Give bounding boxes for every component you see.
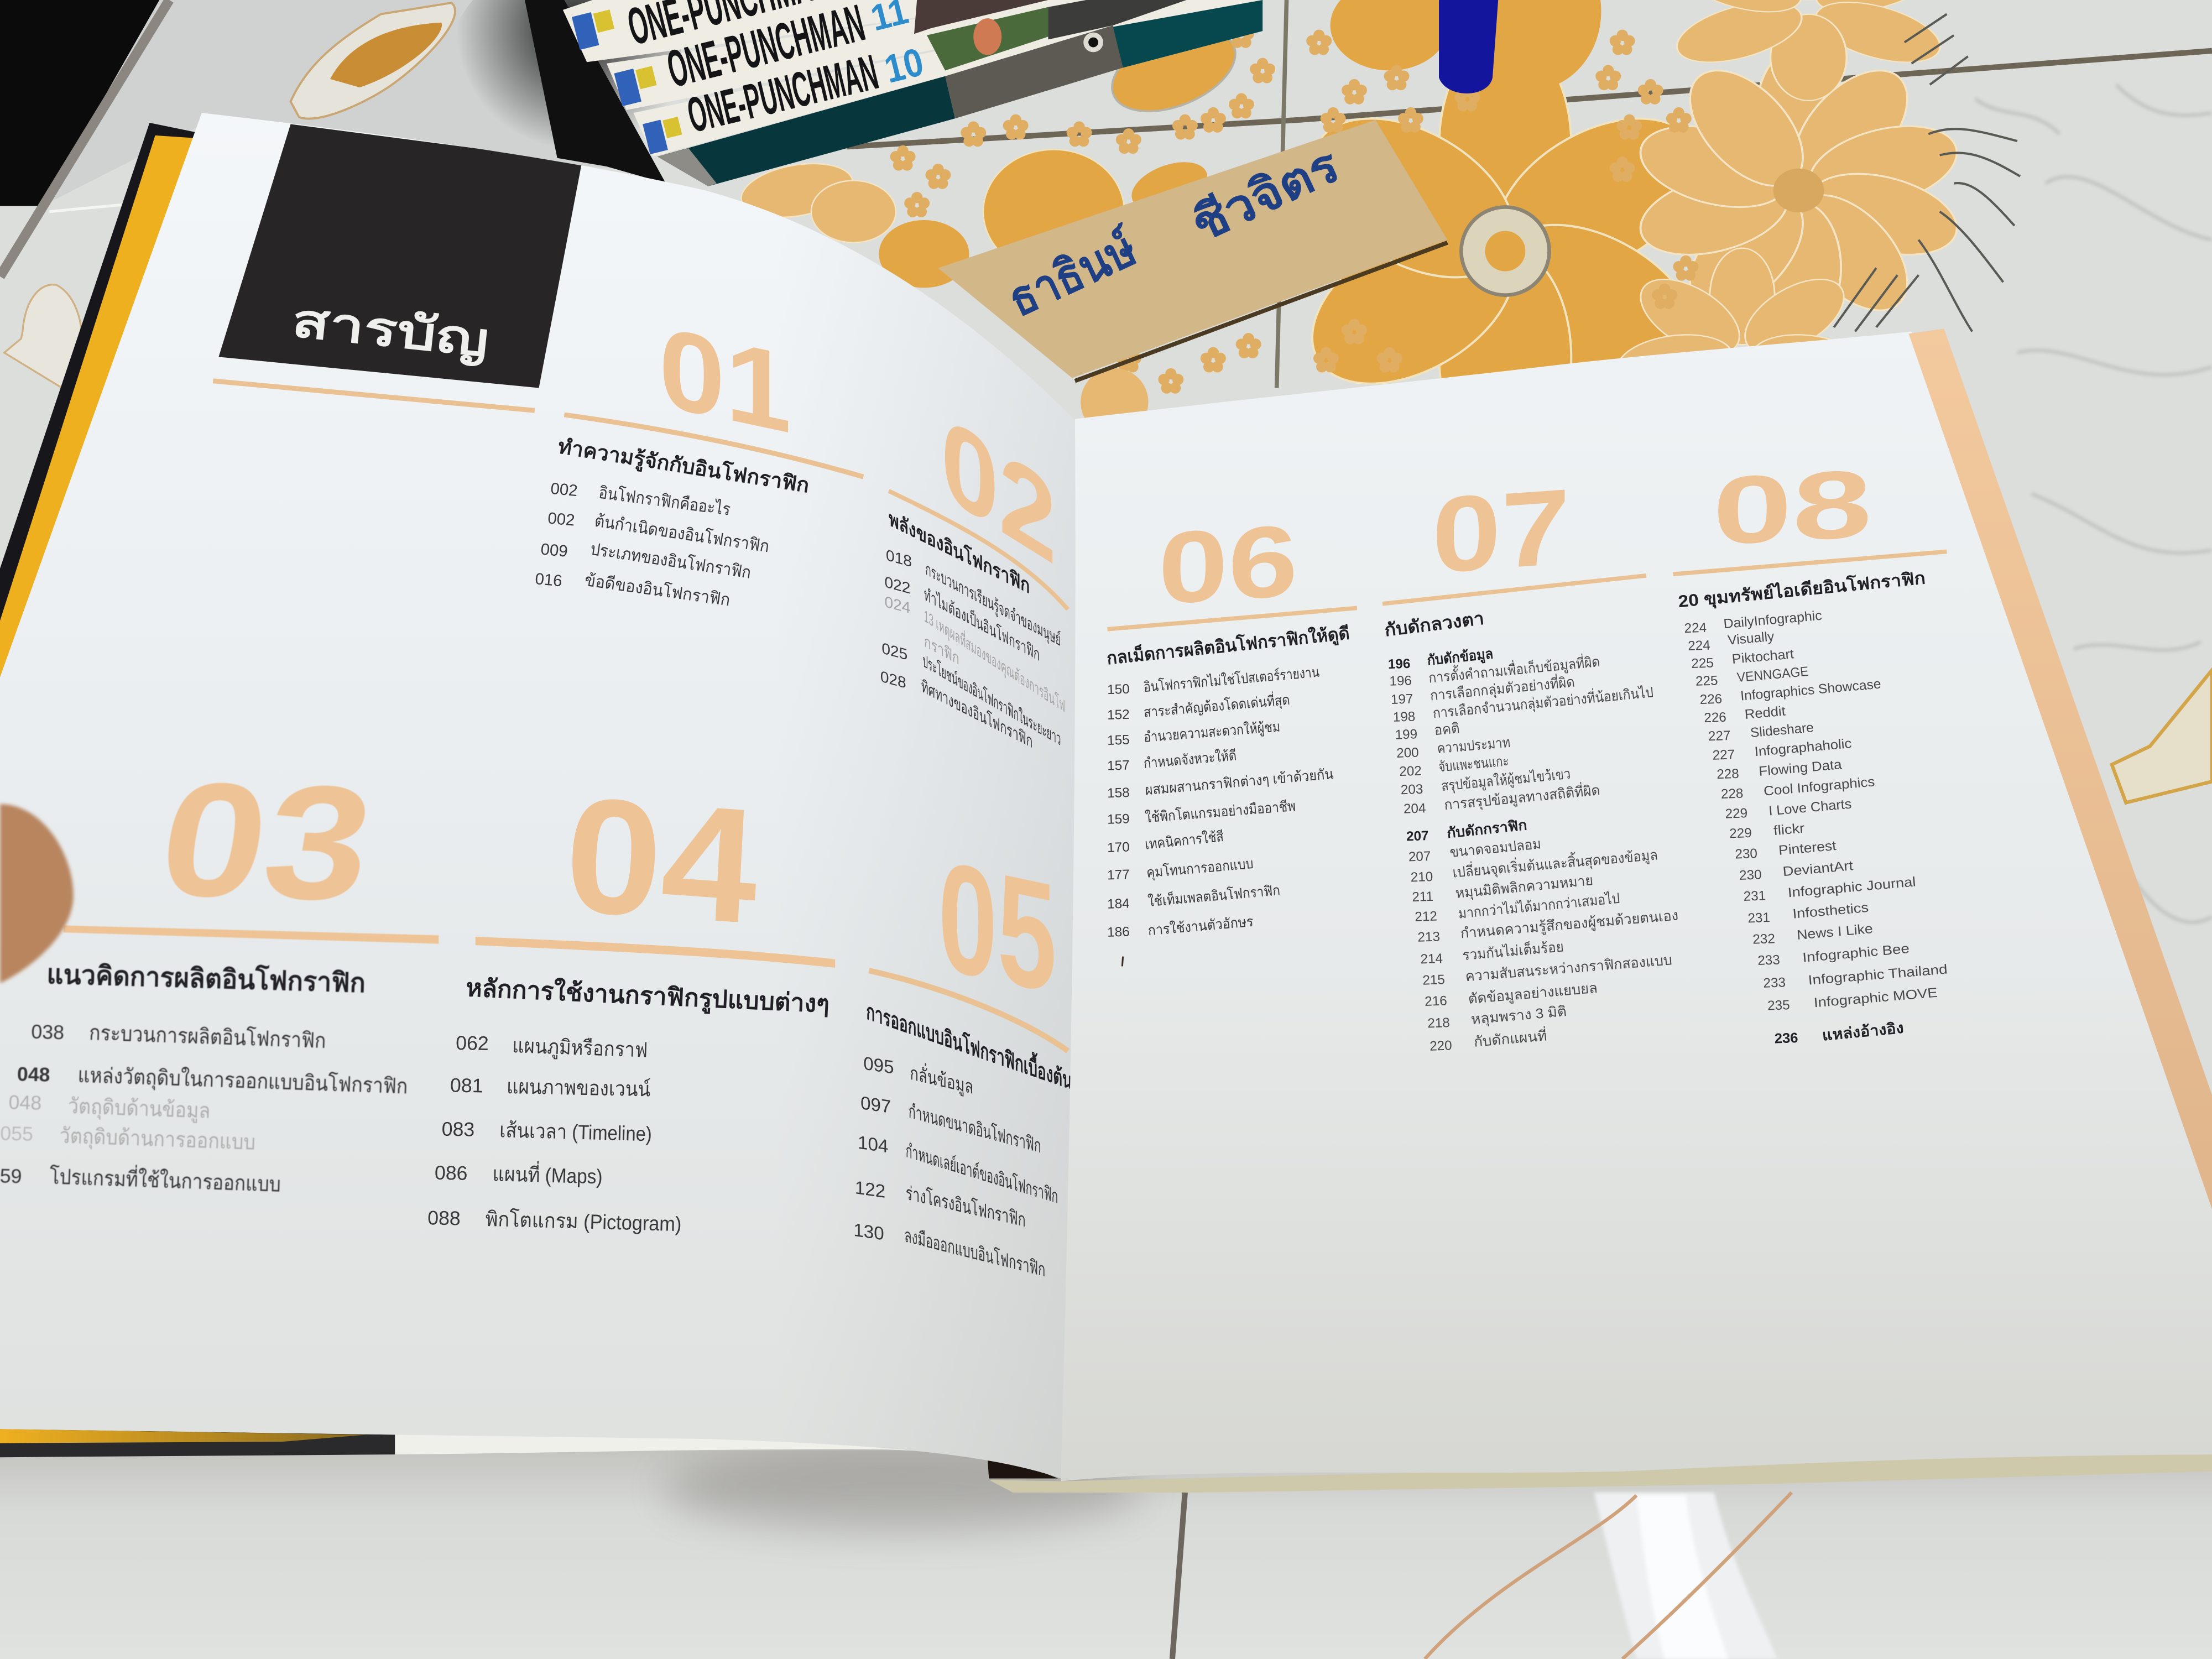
section 07: การเลือกกลุ่มตัวอย่างที่ผิด xyxy=(1429,672,1575,705)
section 08: 20 ขุมทรัพย์ไอเดียอินโฟกราฟิก xyxy=(1677,567,1926,612)
section 06: สาระสำคัญต้องโดดเด่นที่สุด xyxy=(1143,690,1291,721)
section 08: 226 xyxy=(1699,692,1723,707)
section 06: 186 xyxy=(1107,924,1130,940)
section 07: เปลี่ยนจุดเริ่มต้นและสิ้นสุดของข้อมูล xyxy=(1452,844,1658,881)
section 02: กระบวนการเรียนรู้จดจำของมนุษย์ xyxy=(925,559,1061,651)
section 04 xyxy=(427,762,835,1235)
section 08: 230 xyxy=(1735,846,1757,862)
section 07: 212 xyxy=(1415,909,1437,925)
section 08: 228 xyxy=(1721,786,1744,802)
section 08: 225 xyxy=(1691,656,1714,671)
section 07: 213 xyxy=(1417,929,1440,945)
section 07: การสรุปข้อมูลทางสถิติที่ผิด xyxy=(1443,780,1601,813)
section 05: 104 xyxy=(858,1133,888,1157)
section 05: 130 xyxy=(853,1220,884,1244)
section 08: flickr xyxy=(1773,821,1805,838)
marble veins on the right tile xyxy=(1975,85,2212,922)
section 06: อินโฟกราฟิกไม่ใช่โปสเตอร์รายงาน xyxy=(1143,664,1320,695)
section 07: 207 xyxy=(1408,849,1431,864)
section 03: 038 xyxy=(31,1021,65,1044)
section 08: 233 xyxy=(1757,953,1780,968)
section 08: Infographic Journal xyxy=(1787,874,1916,900)
section 07: 197 xyxy=(1391,692,1413,707)
section 07: กำหนดความรู้สึกของผู้ชมด้วยตนเอง xyxy=(1460,907,1679,942)
section 08: 227 xyxy=(1708,728,1731,744)
section 08 xyxy=(1673,450,1948,1046)
section 06: เทคนิคการใช้สี xyxy=(1144,828,1224,853)
section 08: แหล่งอ้างอิง xyxy=(1822,1020,1905,1044)
section 07: มากกว่าไม่ได้มากกว่าเสมอไป xyxy=(1458,890,1620,922)
section 07: 215 xyxy=(1422,972,1445,988)
section 06: 184 xyxy=(1107,896,1130,912)
small tick mark xyxy=(1122,957,1123,966)
section 03: วัตถุดิบด้านข้อมูล xyxy=(67,1094,211,1124)
section 06: 177 xyxy=(1107,867,1130,883)
section 05: 097 xyxy=(860,1093,891,1118)
section 04: แผนภาพของเวนน์ xyxy=(507,1075,651,1100)
section 04: 04 xyxy=(561,762,764,958)
section 07 xyxy=(1383,466,1679,1054)
section 08: 230 xyxy=(1739,867,1762,883)
section 07: หมุนมิติพลิกความหมาย xyxy=(1455,873,1594,902)
section 08: News I Like xyxy=(1796,921,1874,943)
leaf on right tile xyxy=(2112,670,2212,803)
section 07: รวมกันไม่เต็มร้อย xyxy=(1462,938,1564,963)
section 06: 150 xyxy=(1107,682,1130,697)
section 06: 152 xyxy=(1107,707,1130,723)
section 05: การออกแบบอินโฟกราฟิกเบื้องต้น xyxy=(866,994,1072,1094)
section 07: ขนาดจอมปลอม xyxy=(1449,836,1542,860)
section 06: คุมโทนการออกแบบ xyxy=(1146,855,1254,881)
section 08: 228 xyxy=(1717,766,1739,782)
section 01: 01 xyxy=(659,302,791,457)
section 07: สรุปข้อมูลให้ผู้ชมไขว้เขว xyxy=(1441,766,1571,795)
section 05: 095 xyxy=(863,1053,894,1078)
right page peach strip xyxy=(1909,328,2212,1209)
book: volume 11 spine xyxy=(607,0,1186,110)
section 06: 170 xyxy=(1107,839,1130,855)
section 07: 210 xyxy=(1410,869,1433,885)
section 01 xyxy=(535,332,864,606)
section 06: 159 xyxy=(1107,811,1130,827)
section 08: 229 xyxy=(1729,826,1752,841)
title block: สารบัญ xyxy=(218,124,582,388)
section 03: วัตถุดิบด้านการออกแบบ xyxy=(59,1124,256,1155)
section 08: 224 xyxy=(1688,638,1710,654)
section 08: Pinterest xyxy=(1778,838,1837,858)
section 01: ประเภทของอินโฟกราฟิก xyxy=(589,539,753,582)
section 07: 196 xyxy=(1387,656,1411,672)
section 04: หลักการใช้งานกราฟิกรูปแบบต่างๆ xyxy=(465,973,830,1020)
section 05: 05 xyxy=(938,828,1057,1026)
section 01: อินโฟกราฟิกคืออะไร xyxy=(598,483,732,519)
section 07: 207 xyxy=(1406,828,1429,844)
section 07: 218 xyxy=(1427,1015,1450,1031)
section 06: กลเม็ดการผลิตอินโฟกราฟิกให้ดูดี xyxy=(1105,622,1351,670)
section 08: Infographic Thailand xyxy=(1808,962,1948,988)
section 07: 220 xyxy=(1430,1038,1452,1054)
section 07: ตัดข้อมูลอย่างแยบยล xyxy=(1468,980,1598,1008)
title block: สารบัญ: สารบัญ xyxy=(289,294,492,368)
section 07: กับดักแผนที่ xyxy=(1473,1026,1547,1050)
rule under title xyxy=(213,381,535,410)
section 05: กำหนดขนาดอินโฟกราฟิก xyxy=(909,1100,1041,1157)
section 01: 002 xyxy=(550,479,578,500)
section 02: 13 เหตุผลที่สมองของคุณต้องการอินโฟ xyxy=(924,604,1065,717)
section 06: 155 xyxy=(1107,733,1130,748)
section 06: 158 xyxy=(1107,785,1130,801)
section 03: แนวคิดการผลิตอินโฟกราฟิก xyxy=(46,958,366,998)
section 08: Flowing Data xyxy=(1758,757,1843,779)
section 07: กับดักลวงตา xyxy=(1384,608,1485,640)
section 08: 224 xyxy=(1684,620,1707,636)
section 04: 083 xyxy=(441,1118,475,1141)
section 02: 022 xyxy=(884,573,910,598)
section 07: การเลือกจำนวนกลุ่มตัวอย่างที่น้อยเกินไป xyxy=(1432,682,1654,722)
section 07: 07 xyxy=(1432,466,1570,596)
section 08: 227 xyxy=(1712,747,1735,763)
section 03: 055 xyxy=(0,1122,33,1145)
section 08: 232 xyxy=(1752,931,1775,947)
section 07: 198 xyxy=(1392,709,1416,725)
section 06: กำหนดจังหวะให้ดี xyxy=(1143,747,1237,771)
section 07: การตั้งคำถามเพื่อเก็บข้อมูลที่ผิด xyxy=(1428,651,1601,687)
book: volume 10 spine: 10 xyxy=(880,40,928,92)
section 07: 202 xyxy=(1399,764,1422,779)
section 06 xyxy=(1105,504,1357,940)
section 05: 122 xyxy=(855,1177,885,1202)
section 07: 211 xyxy=(1412,889,1433,905)
section 01: ต้นกำเนิดของอินโฟกราฟิก xyxy=(593,511,770,556)
section 07: จับแพะชนแกะ xyxy=(1438,753,1510,775)
section 05: กลั่นข้อมูล xyxy=(910,1060,973,1099)
book: volume 10 spine xyxy=(633,0,1262,156)
section 08: Infosthetics xyxy=(1792,900,1869,922)
section 08: Piktochart xyxy=(1731,646,1794,667)
section 01: ทำความรู้จักกับอินโฟกราฟิก xyxy=(556,434,811,499)
section 08: Visually xyxy=(1727,629,1775,648)
section 02: 024 xyxy=(884,593,910,617)
section 04: 088 xyxy=(427,1207,461,1229)
section 08: 236 xyxy=(1774,1030,1798,1046)
section 01: 002 xyxy=(547,509,576,530)
section 05: ร่างโครงอินโฟกราฟิก xyxy=(906,1182,1026,1231)
section 07: กับดักข้อมูล xyxy=(1426,646,1494,670)
section 08: 233 xyxy=(1763,975,1786,991)
section 06: ผสมผสานกราฟิกต่างๆ เข้าด้วยกัน xyxy=(1145,766,1334,798)
section 04: พิกโตแกรม (Pictogram) xyxy=(485,1207,682,1235)
section 08: Infographics Showcase xyxy=(1740,676,1882,704)
section 02: 025 xyxy=(881,640,907,664)
section 05: กำหนดเลย์เอาต์ของอินโฟกราฟิก xyxy=(906,1140,1058,1208)
section 02: กราฟิก xyxy=(924,632,959,669)
tile flowers behind the book xyxy=(737,0,1969,467)
section 07: 204 xyxy=(1404,801,1426,817)
section 03 xyxy=(0,749,439,1197)
section 07: 214 xyxy=(1420,951,1443,967)
section 07: 196 xyxy=(1389,673,1412,689)
left page xyxy=(0,113,1076,1478)
section 08: 229 xyxy=(1725,806,1748,822)
section 06: 157 xyxy=(1107,758,1130,774)
dark leaf strokes next to the tile flowers xyxy=(1834,14,2020,331)
section 08: DailyInfographic xyxy=(1723,608,1823,632)
section 08: 235 xyxy=(1767,998,1790,1014)
left page contents xyxy=(0,124,1072,1281)
section 08: Infographaholic xyxy=(1754,736,1852,759)
section 07: 199 xyxy=(1395,727,1418,743)
section 07: 203 xyxy=(1400,782,1423,797)
section 08: 08 xyxy=(1713,450,1872,565)
section 04: 062 xyxy=(456,1032,489,1055)
section 07: 200 xyxy=(1396,745,1419,761)
thumb holding the page xyxy=(0,804,74,983)
section 04: แผนที่ (Maps) xyxy=(492,1160,603,1188)
section 03: แหล่งวัตถุดิบในการออกแบบอินโฟกราฟิก xyxy=(77,1063,408,1099)
section 02: ทิศทางของอินโฟกราฟิก xyxy=(921,676,1032,752)
section 08: Infographic Bee xyxy=(1802,941,1910,966)
section 01: 009 xyxy=(540,540,568,561)
section 02: 018 xyxy=(886,546,912,571)
section 03: กระบวนการผลิตอินโฟกราฟิก xyxy=(88,1020,326,1053)
section 04: 086 xyxy=(435,1162,468,1185)
right page xyxy=(1061,328,2212,1481)
section 04: แผนภูมิหรือกราฟ xyxy=(512,1034,648,1063)
section 06: อำนวยความสะดวกให้ผู้ชม xyxy=(1143,718,1281,746)
section 08: Slideshare xyxy=(1750,720,1814,740)
cardboard name tag xyxy=(938,120,1447,381)
section 02 xyxy=(881,426,1070,748)
section 04: เส้นเวลา (Timeline) xyxy=(499,1119,652,1145)
section 08: Infographic MOVE xyxy=(1813,985,1938,1010)
section 08: I Love Charts xyxy=(1768,796,1852,818)
section 07: อคติ xyxy=(1433,721,1460,738)
section 03: 048 xyxy=(8,1091,42,1114)
section 07: 216 xyxy=(1425,993,1447,1009)
blue pen xyxy=(1439,0,1498,93)
book: teal spine xyxy=(658,76,955,186)
floor below the book xyxy=(0,1446,2212,1659)
section 08: 225 xyxy=(1695,673,1718,689)
stack of One-Punch Man books xyxy=(525,0,1262,186)
section 08: DeviantArt xyxy=(1782,858,1854,879)
section 01: ข้อดีของอินโฟกราฟิก xyxy=(583,570,732,610)
section 02: ทำไมต้องเป็นอินโฟกราฟิก xyxy=(924,583,1040,665)
section 08: VENNGAGE xyxy=(1736,664,1809,685)
section 02: พลังของอินโฟกราฟิก xyxy=(889,507,1030,598)
section 02: ประโยชน์ของอินโฟกราฟิกในระยะยาว xyxy=(922,650,1061,750)
section 02: 028 xyxy=(880,668,906,692)
section 07: หลุมพราง 3 มิติ xyxy=(1470,1004,1567,1028)
section 06: การใช้งานตัวอักษร xyxy=(1147,914,1254,938)
section 04: 081 xyxy=(450,1074,483,1097)
section 02: 02 xyxy=(941,389,1057,591)
left cover: black edge and yellow band xyxy=(0,123,1058,1478)
section 08: 231 xyxy=(1743,888,1766,904)
section 06: ใช้พิกโตแกรมอย่างมืออาชีพ xyxy=(1145,798,1296,826)
section 01: 016 xyxy=(534,570,563,590)
decorative tile petals, upper left xyxy=(4,3,455,388)
section 05: ลงมือออกแบบอินโฟกราฟิก xyxy=(904,1224,1045,1281)
section 06: ใช้เท็มเพลตอินโฟกราฟิก xyxy=(1147,881,1281,910)
section 07: กับดักกราฟิก xyxy=(1446,817,1528,841)
book cover edge, right xyxy=(989,1450,2212,1493)
cover art on spine xyxy=(927,7,1048,71)
section 03: 03 xyxy=(148,749,384,935)
section 05 xyxy=(855,865,1071,1276)
cardboard name tag: ธาธินษ์ xyxy=(1000,221,1145,327)
section 07: ความสับสนระหว่างกราฟิกสองแบบ xyxy=(1465,952,1673,984)
section 08: 231 xyxy=(1747,910,1770,926)
section 03: 048 xyxy=(17,1063,50,1086)
cardboard name tag: ชีวจิตร xyxy=(1184,138,1347,252)
section 06: 06 xyxy=(1158,504,1298,625)
section 07: ความประมาท xyxy=(1437,735,1511,757)
section 08: 226 xyxy=(1704,710,1726,726)
section 08: Cool Infographics xyxy=(1763,774,1875,799)
section 03: โปรแกรมที่ใช้ในการออกแบบ xyxy=(49,1161,281,1197)
section 08: Reddit xyxy=(1744,704,1786,722)
